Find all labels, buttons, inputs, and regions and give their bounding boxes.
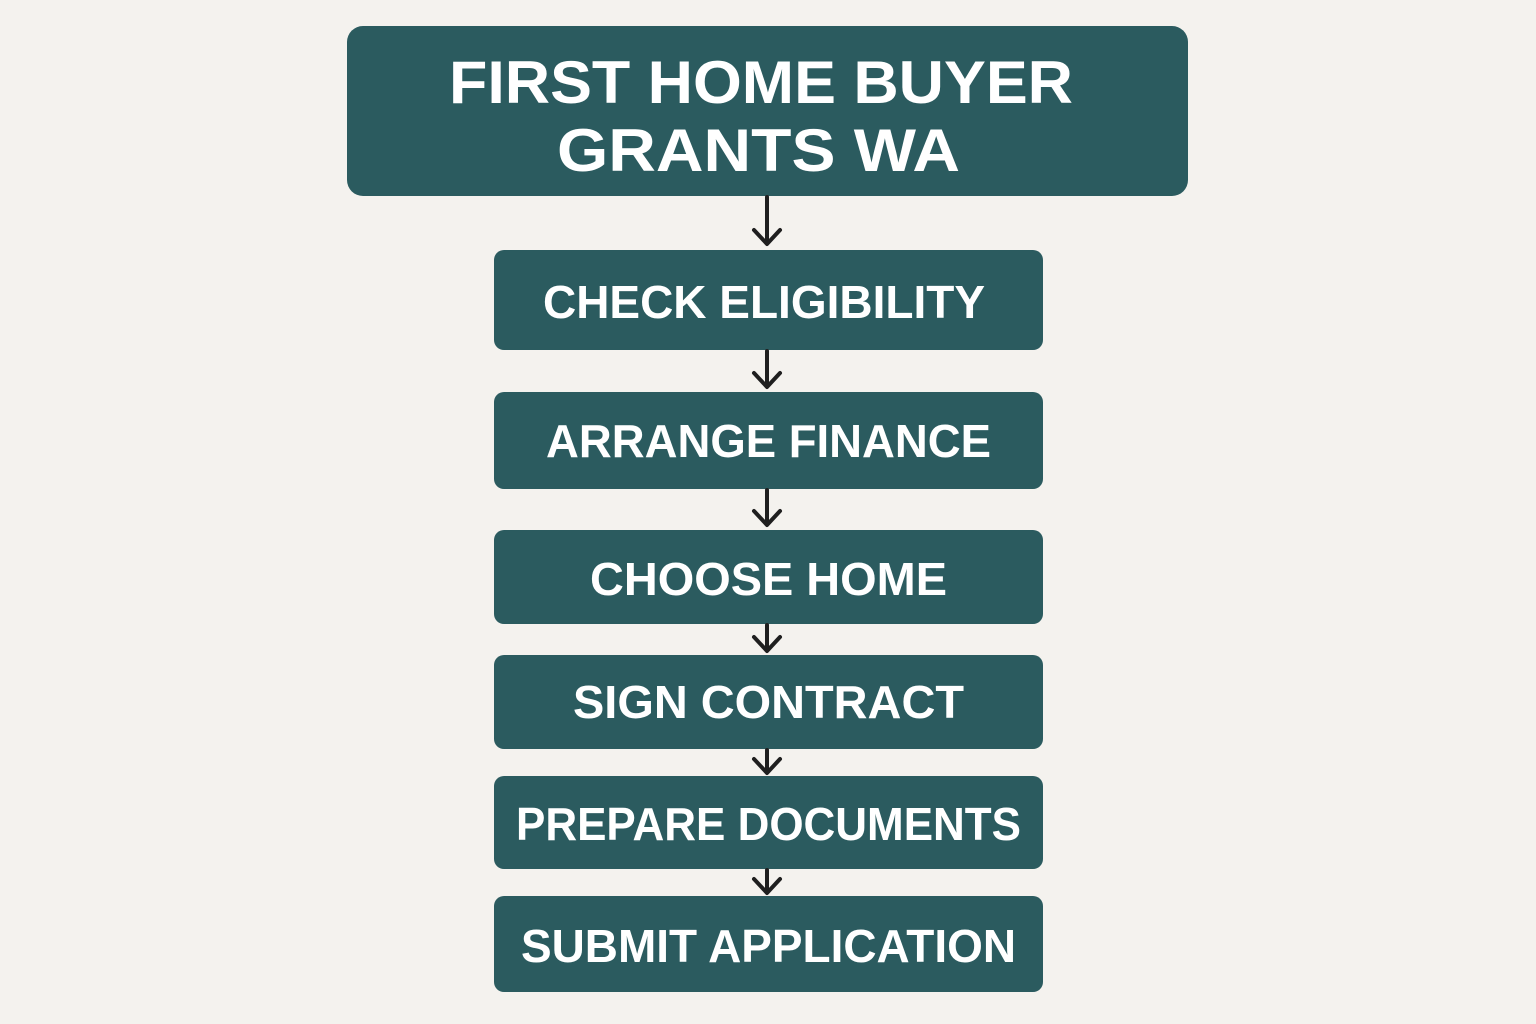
step 4: sign contract: SIGN CONTRACT <box>573 676 964 728</box>
step 1: check eligibility <box>494 250 1043 350</box>
step 5: prepare documents: PREPARE DOCUMENTS <box>516 798 1021 850</box>
step 3: choose home <box>494 530 1043 624</box>
step 1: check eligibility: CHECK ELIGIBILITY <box>543 276 985 328</box>
step 2: arrange finance: ARRANGE FINANCE <box>546 415 991 467</box>
title: GRANTS WA <box>557 117 960 184</box>
step 2: arrange finance <box>494 392 1043 489</box>
step 4: sign contract <box>494 655 1043 749</box>
arrow: step 4 to 5 <box>754 750 780 773</box>
step 5: prepare documents <box>494 776 1043 869</box>
arrow: step 3 to 4 <box>754 625 780 651</box>
title <box>347 26 1188 196</box>
step 3: choose home: CHOOSE HOME <box>590 553 947 605</box>
step 6: submit application: SUBMIT APPLICATION <box>521 920 1016 972</box>
title: FIRST HOME BUYER <box>449 49 1073 116</box>
arrow: title to step 1 <box>754 197 780 244</box>
arrow: step 1 to 2 <box>754 351 780 387</box>
arrow: step 5 to 6 <box>754 870 780 893</box>
step 6: submit application <box>494 896 1043 992</box>
arrow: step 2 to 3 <box>754 490 780 525</box>
